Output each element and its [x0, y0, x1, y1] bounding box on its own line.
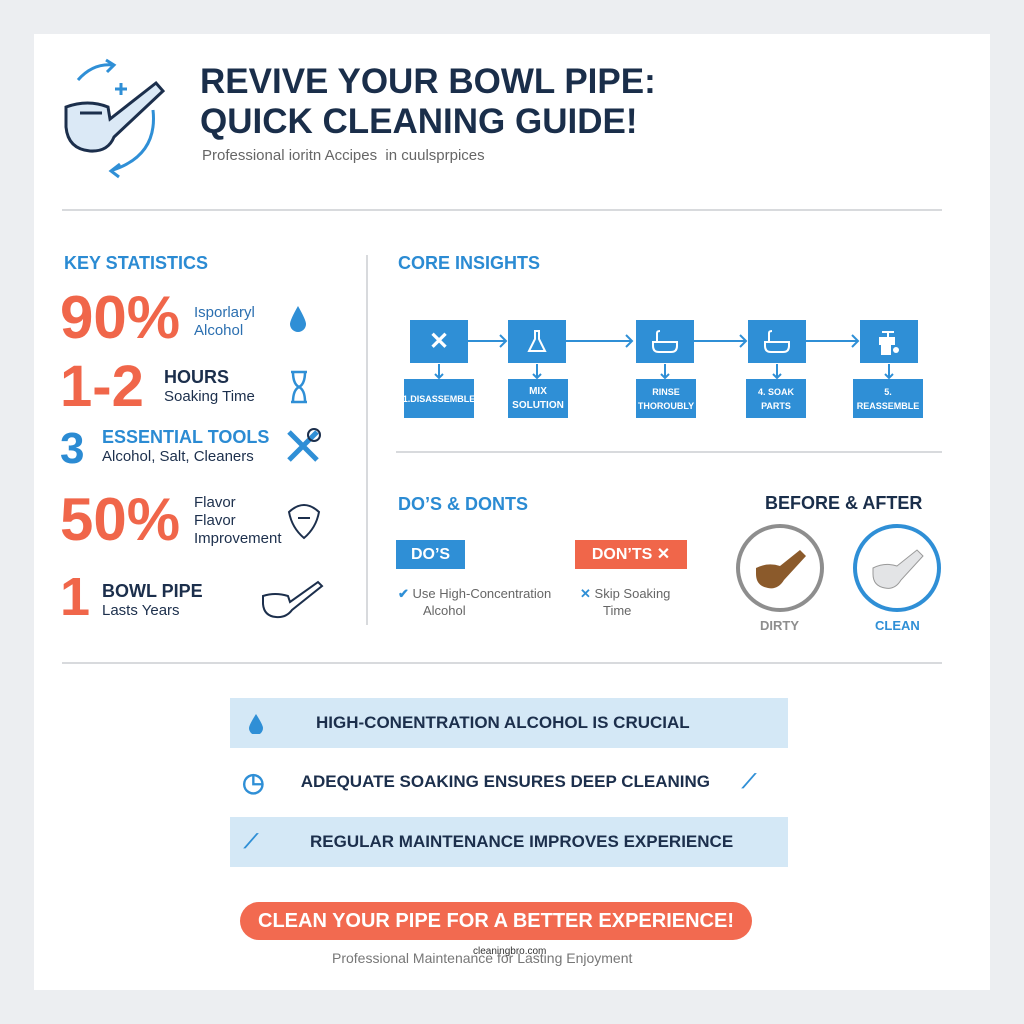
do item: [398, 586, 551, 618]
CTA button: [240, 902, 752, 940]
title: QUICK CLEANING GUIDE!: [200, 102, 638, 141]
stat: 3 essential tools: Alcohol, Salt, Cleaners: [102, 448, 254, 465]
process flow: RINSE: [652, 386, 680, 396]
process flow: [403, 320, 923, 418]
heading: dos and donts: DO’S & DONTS: [398, 494, 528, 514]
banner 1: HIGH-CONENTRATION ALCOHOL IS CRUCIAL: [316, 713, 690, 732]
title: REVIVE YOUR BOWL PIPE:: [200, 62, 656, 101]
footer: Professional Maintenance for Lasting Enjoyment: [332, 950, 632, 966]
CTA button: CLEAN YOUR PIPE FOR A BETTER EXPERIENCE!: [258, 910, 734, 932]
banner 2: [242, 766, 757, 796]
banner 2: ⟋: [742, 770, 756, 792]
heading: before & after: BEFORE & AFTER: [765, 493, 922, 513]
process flow: 5. REASSEMBLE: [857, 386, 919, 410]
before/after circles: [736, 524, 941, 633]
process flow: 4. SOAK PARTS: [758, 386, 794, 410]
before/after circles: CLEAN: [875, 618, 920, 633]
stat: 90%: 90%: [60, 284, 180, 351]
heading: key statistics: KEY STATISTICS: [64, 253, 208, 273]
banner 2: ◷: [242, 766, 265, 796]
donts box: DON’TS ✕: [592, 546, 670, 562]
title: [200, 62, 656, 141]
process flow: MIX: [529, 386, 547, 396]
stat: 50% flavor: [60, 486, 320, 553]
banner 3: ⟋: [244, 830, 258, 852]
process flow: ✕: [429, 328, 449, 354]
stat: 90%: [60, 284, 306, 351]
do item: Alcohol: [423, 603, 466, 618]
dos box: [396, 540, 465, 569]
do item: ✔ Use High-Concentration: [398, 586, 551, 601]
stat: 1 bowl pipe: [60, 567, 324, 627]
process flow: THOROUBLY: [638, 400, 694, 410]
process flow: SOLUTION: [512, 400, 564, 410]
stat: 1-2 hours: Soaking Time: [164, 388, 255, 405]
stat: 90%: Alcohol: [194, 322, 243, 339]
heading: core insights: CORE INSIGHTS: [398, 253, 540, 273]
icon: pipe logo: [64, 58, 165, 178]
stat: 50% flavor: Improvement: [194, 530, 282, 547]
stat: 1-2 hours: HOURS: [164, 367, 229, 387]
dos box: DO’S: [411, 546, 450, 562]
stat: 1 bowl pipe: BOWL PIPE: [102, 581, 203, 601]
stat: 50% flavor: Flavor: [194, 494, 236, 511]
stat: 3 essential tools: [60, 424, 321, 473]
stat: 1-2 hours: 1-2: [60, 354, 144, 419]
banner 2: ADEQUATE SOAKING ENSURES DEEP CLEANING: [301, 772, 710, 791]
website: cleaningbro.com: [473, 946, 546, 957]
donts box: [575, 540, 687, 569]
banner 1: [230, 698, 788, 748]
banner 3: REGULAR MAINTENANCE IMPROVES EXPERIENCE: [310, 832, 733, 851]
stat: 90%: Isporlaryl: [194, 304, 255, 321]
stat: 3 essential tools: 3: [60, 424, 84, 473]
process flow: 1.DISASSEMBLE: [403, 394, 475, 404]
stat: 1 bowl pipe: Lasts Years: [102, 602, 180, 619]
dont item: ✕ Skip Soaking: [580, 586, 670, 601]
before/after circles: DIRTY: [760, 618, 799, 633]
stat: 50% flavor: Flavor: [194, 512, 236, 529]
dont item: [580, 586, 670, 618]
subtitle: Professional ioritn Accipes in cuulsprpices: [202, 147, 485, 164]
stat: 1-2 hours: [60, 354, 307, 419]
stat: 50% flavor: 50%: [60, 486, 180, 553]
banner 3: [230, 817, 788, 867]
stat: 3 essential tools: ESSENTIAL TOOLS: [102, 427, 269, 447]
stat: 1 bowl pipe: 1: [60, 567, 90, 627]
dont item: Time: [603, 603, 631, 618]
